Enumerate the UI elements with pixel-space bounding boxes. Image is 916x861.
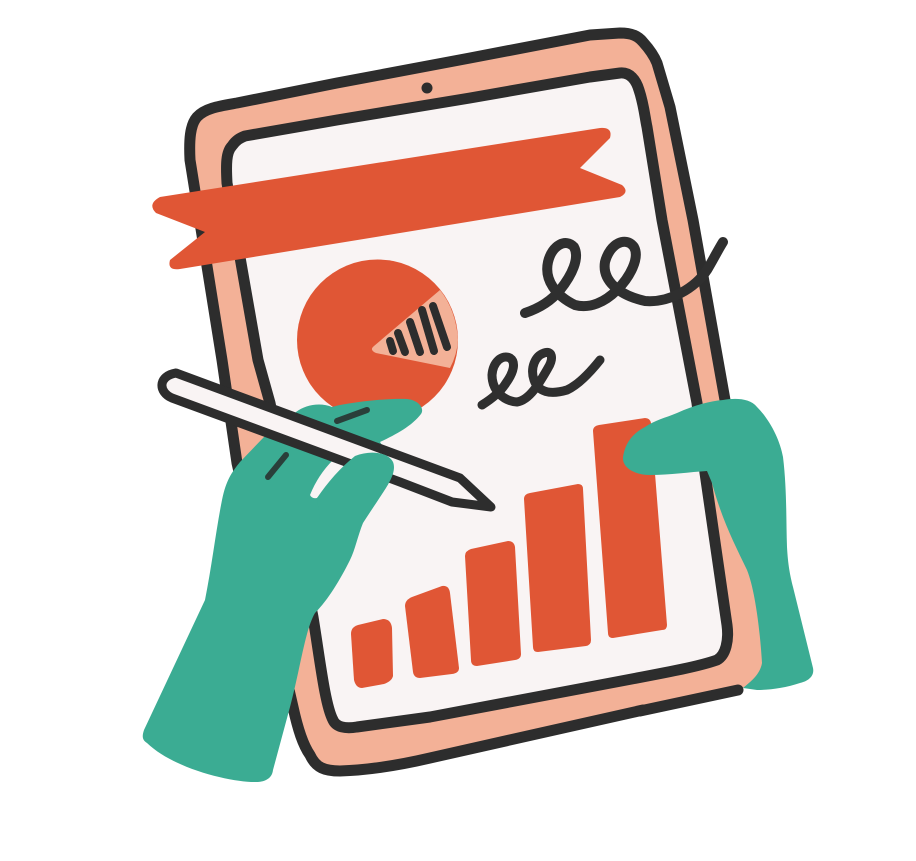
finger over pen bbox=[317, 453, 394, 540]
right hand bbox=[623, 399, 813, 690]
pie chart bbox=[297, 260, 458, 420]
knuckle strokes bbox=[268, 410, 367, 477]
tablet body bbox=[190, 33, 765, 771]
scribble line large bbox=[525, 242, 723, 313]
left hand bbox=[143, 399, 422, 782]
stylus pen bbox=[162, 373, 491, 507]
gap between fingers bbox=[310, 455, 350, 498]
scribble line small bbox=[482, 352, 600, 405]
tablet screen bbox=[227, 73, 728, 728]
ribbon banner bbox=[152, 128, 626, 269]
bar chart bbox=[351, 418, 667, 688]
camera dot bbox=[422, 82, 432, 94]
pie stripes bbox=[390, 306, 447, 352]
tablet bottom edge end bbox=[640, 690, 738, 711]
